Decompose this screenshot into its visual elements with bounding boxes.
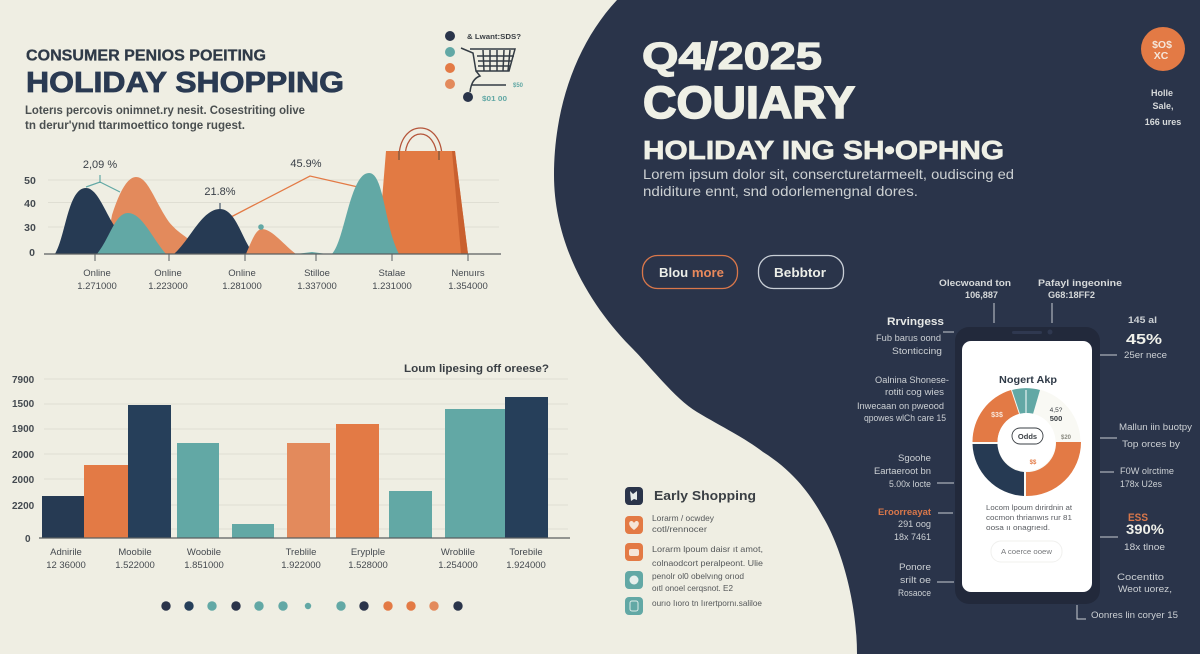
bar chart title: Loum lipesing off oreese? [404,363,549,375]
percentage labels: 2,09 % [83,159,117,171]
x axis labels: 1.223000 [148,281,188,292]
x axis labels: 1.528000 [348,560,388,571]
callouts: left: qpowes wlCh care 15 [864,413,946,423]
x axis labels [46,547,546,571]
callouts: left: Oalnina Shonese- [875,375,949,385]
callouts: right: Weot uorez, [1118,584,1172,594]
y axis labels: 7900 [12,375,35,386]
callouts: left: Rosaoce [898,588,931,598]
pagination dots [161,601,463,611]
x axis labels: 1.281000 [222,281,262,292]
callouts: right: ESS [1128,512,1148,524]
callouts: right: Mallun iin buotpy [1119,422,1193,432]
quarter title: Q4/2025 [642,36,822,78]
donut chart: Odds [1018,432,1037,441]
x axis labels: 1.337000 [297,281,337,292]
percentage labels: 45.9% [290,158,322,170]
callouts: left: srilt oe [900,575,931,585]
button: secondary [758,256,844,288]
app button [991,541,1062,562]
percentage labels [83,158,322,198]
badge caption: Holle [1151,88,1173,98]
list text: penolr ol0 obelvıng orıod [652,571,744,581]
x axis labels: 1.254000 [438,560,478,571]
callouts: right [1077,315,1193,620]
callouts: left [857,316,954,598]
callouts: right: Oonres lin coryer 15 [1091,610,1178,620]
subtitle: HOLIDAY ING SH•OPHNG [643,135,1004,165]
eyebrow heading: CONSUMER PENIOS POEITING [26,48,266,64]
y axis labels [24,175,36,259]
list text: Lorarm / ocwdey [652,513,715,523]
callouts: right: 145 al [1128,315,1157,325]
y axis labels: 50 [24,175,36,187]
bars [42,397,548,538]
callouts: top [939,278,1122,323]
badge caption: Sale, [1152,101,1174,111]
dark wave panel [554,0,1200,654]
badge caption: 166 ures [1145,117,1181,127]
x axis labels: Stalae [379,268,405,279]
hero description [643,166,1014,199]
bar chart [12,363,570,571]
x axis labels: Moobile [118,547,152,558]
callouts: left: Eartaeroot bn [874,466,931,476]
x axis labels: 1.231000 [372,281,412,292]
callouts: right: 45% [1126,331,1162,348]
donut chart: 500 [1050,414,1062,423]
callouts: right: F0W olrctime [1120,466,1174,476]
list text: ourıo Iıoro tn Iırertpornı.saliloe [652,598,762,608]
panel: early shopping list [625,487,763,615]
badge caption [1145,88,1181,127]
icon: navy tile [625,487,643,505]
callouts: left: Fub barus oond [876,333,941,343]
x axis labels: Online [83,268,111,279]
orange small peak [246,229,296,254]
callouts: left: Stonticcing [892,346,942,356]
x axis labels: 1.922000 [281,560,321,571]
list heading: Early Shopping [654,488,756,503]
x axis labels: Online [154,268,182,279]
donut labels: $3$ [991,412,1003,419]
callouts: left: Sgoohe [898,453,931,463]
callouts: top: 106,887 [965,290,998,300]
icon: orange heart tile [625,516,643,534]
app button: A coerce ooew [1001,547,1053,556]
shopping bag [382,128,468,254]
main heading: HOLIDAY SHOPPING [26,67,344,99]
button: learn more: Blou more [659,265,724,280]
callouts: left: 291 oog [898,519,931,529]
badge: top right: $O$ [1152,39,1172,51]
callouts: top: Olecwoand ton [939,278,1011,288]
y axis labels: 2000 [12,475,35,486]
callouts: right: 390% [1126,521,1165,537]
x axis labels: 1.522000 [115,560,155,571]
callouts: left: Eroorreayat [878,507,931,517]
x axis labels: Treblile [286,547,316,558]
percentage labels: 21.8% [204,186,236,198]
phone mockup [955,327,1100,604]
x axis labels: 1.354000 [448,281,488,292]
large title: COUIARY [643,77,855,128]
hero description: Lorem ipsum dolor sit, consercturetarmeelt, oudiscing ed [643,166,1014,182]
callouts: right: 178x U2es [1120,479,1162,489]
panel: header left [25,48,344,132]
app text: oosa ıı onagrıeıd. [986,523,1050,532]
x axis labels: Stilloe [304,268,330,279]
icon: orange box tile [625,543,643,561]
cart icon and legend: & Lwant:SDS? [467,32,521,41]
x axis labels: 1.271000 [77,281,117,292]
callouts: left: rotiti cog wies [885,387,945,397]
list text [652,513,763,608]
donut chart: 4,5? [1050,407,1063,414]
app text [986,503,1073,532]
x axis labels: Nenuırs [451,268,485,279]
x axis labels: Eryplple [351,547,385,558]
list text: colnaodcort peralpeont. Ulie [652,558,763,568]
x axis labels: Online [228,268,256,279]
x axis labels: 1.924000 [506,560,546,571]
callouts: right: 25er nece [1124,350,1167,360]
list text: Lorarm lpoum daisr ıt amot, [652,544,763,554]
app title: Nogert Akp [999,374,1057,386]
x axis labels: 12 36000 [46,560,86,571]
x axis labels: Wroblile [441,547,475,558]
y axis labels: 1900 [12,424,35,435]
badge: top right [1141,27,1185,71]
description: Loterıs percovis onimnet.ry nesit. Cosestriting olive [25,105,305,117]
badge: top right: XC [1154,50,1169,62]
button: secondary: Bebbtor [774,265,826,280]
donut chart: $20 [1061,435,1072,441]
callouts: left: Rrvingess [887,316,944,328]
x axis labels: Torebile [509,547,543,558]
callouts: right: Top orces by [1122,439,1181,449]
y axis labels: 40 [24,198,36,210]
description: tn derur'ynıd ttarımoettico tonge rugest. [25,120,245,132]
panel: hero heading [642,36,1014,199]
callouts: right: Cocentito [1117,572,1164,582]
callouts: right: 18x tlnoe [1124,542,1165,552]
y axis labels: 30 [24,222,36,234]
x axis labels: 1.851000 [184,560,224,571]
callouts: top: G68:18FF2 [1048,290,1095,300]
button: learn more [642,256,738,288]
y axis labels [12,375,35,545]
app text: Locom lpoum dırirdnin at [986,503,1073,512]
y axis labels: 0 [25,534,31,545]
icon: teal globe tile [625,571,643,589]
list text: oıtl onoel cerqsnot. E2 [652,583,733,593]
cart icon and legend: $01 00 [482,96,507,103]
description [25,105,305,132]
callouts: left: 5.00x locte [889,479,931,489]
x axis labels [77,268,488,292]
callouts: left: Ponore [899,562,931,572]
y axis labels: 2000 [12,450,35,461]
x axis labels: Woobile [187,547,221,558]
teal peak [97,213,166,254]
icon: teal card tile [625,597,643,615]
callouts: left: 18x 7461 [894,532,931,542]
y axis labels: 1500 [12,399,35,410]
cart icon and legend [445,31,523,103]
navy peak two [174,209,254,254]
y axis labels: 2200 [12,501,35,512]
trend lines [231,176,358,217]
list text: cotl/rennocer [652,524,707,534]
area chart [24,128,501,292]
hero description: ndiditure ennt, snd odorlemengnal dores. [643,183,918,199]
teal tall peak [296,173,399,254]
callouts: left: Inwecaan on pweood [857,401,944,411]
y axis labels: 0 [29,247,35,259]
app text: cocmon thrianwıs rur 81 [986,513,1072,522]
cart icon and legend: $50 [513,82,523,89]
x axis labels: Adnirile [50,547,82,558]
donut chart [972,388,1081,496]
callouts: top: Pafayl ingeonine [1038,278,1122,288]
donut chart: $$ [1030,460,1037,466]
orange peak [105,177,193,254]
navy peak [55,188,122,254]
